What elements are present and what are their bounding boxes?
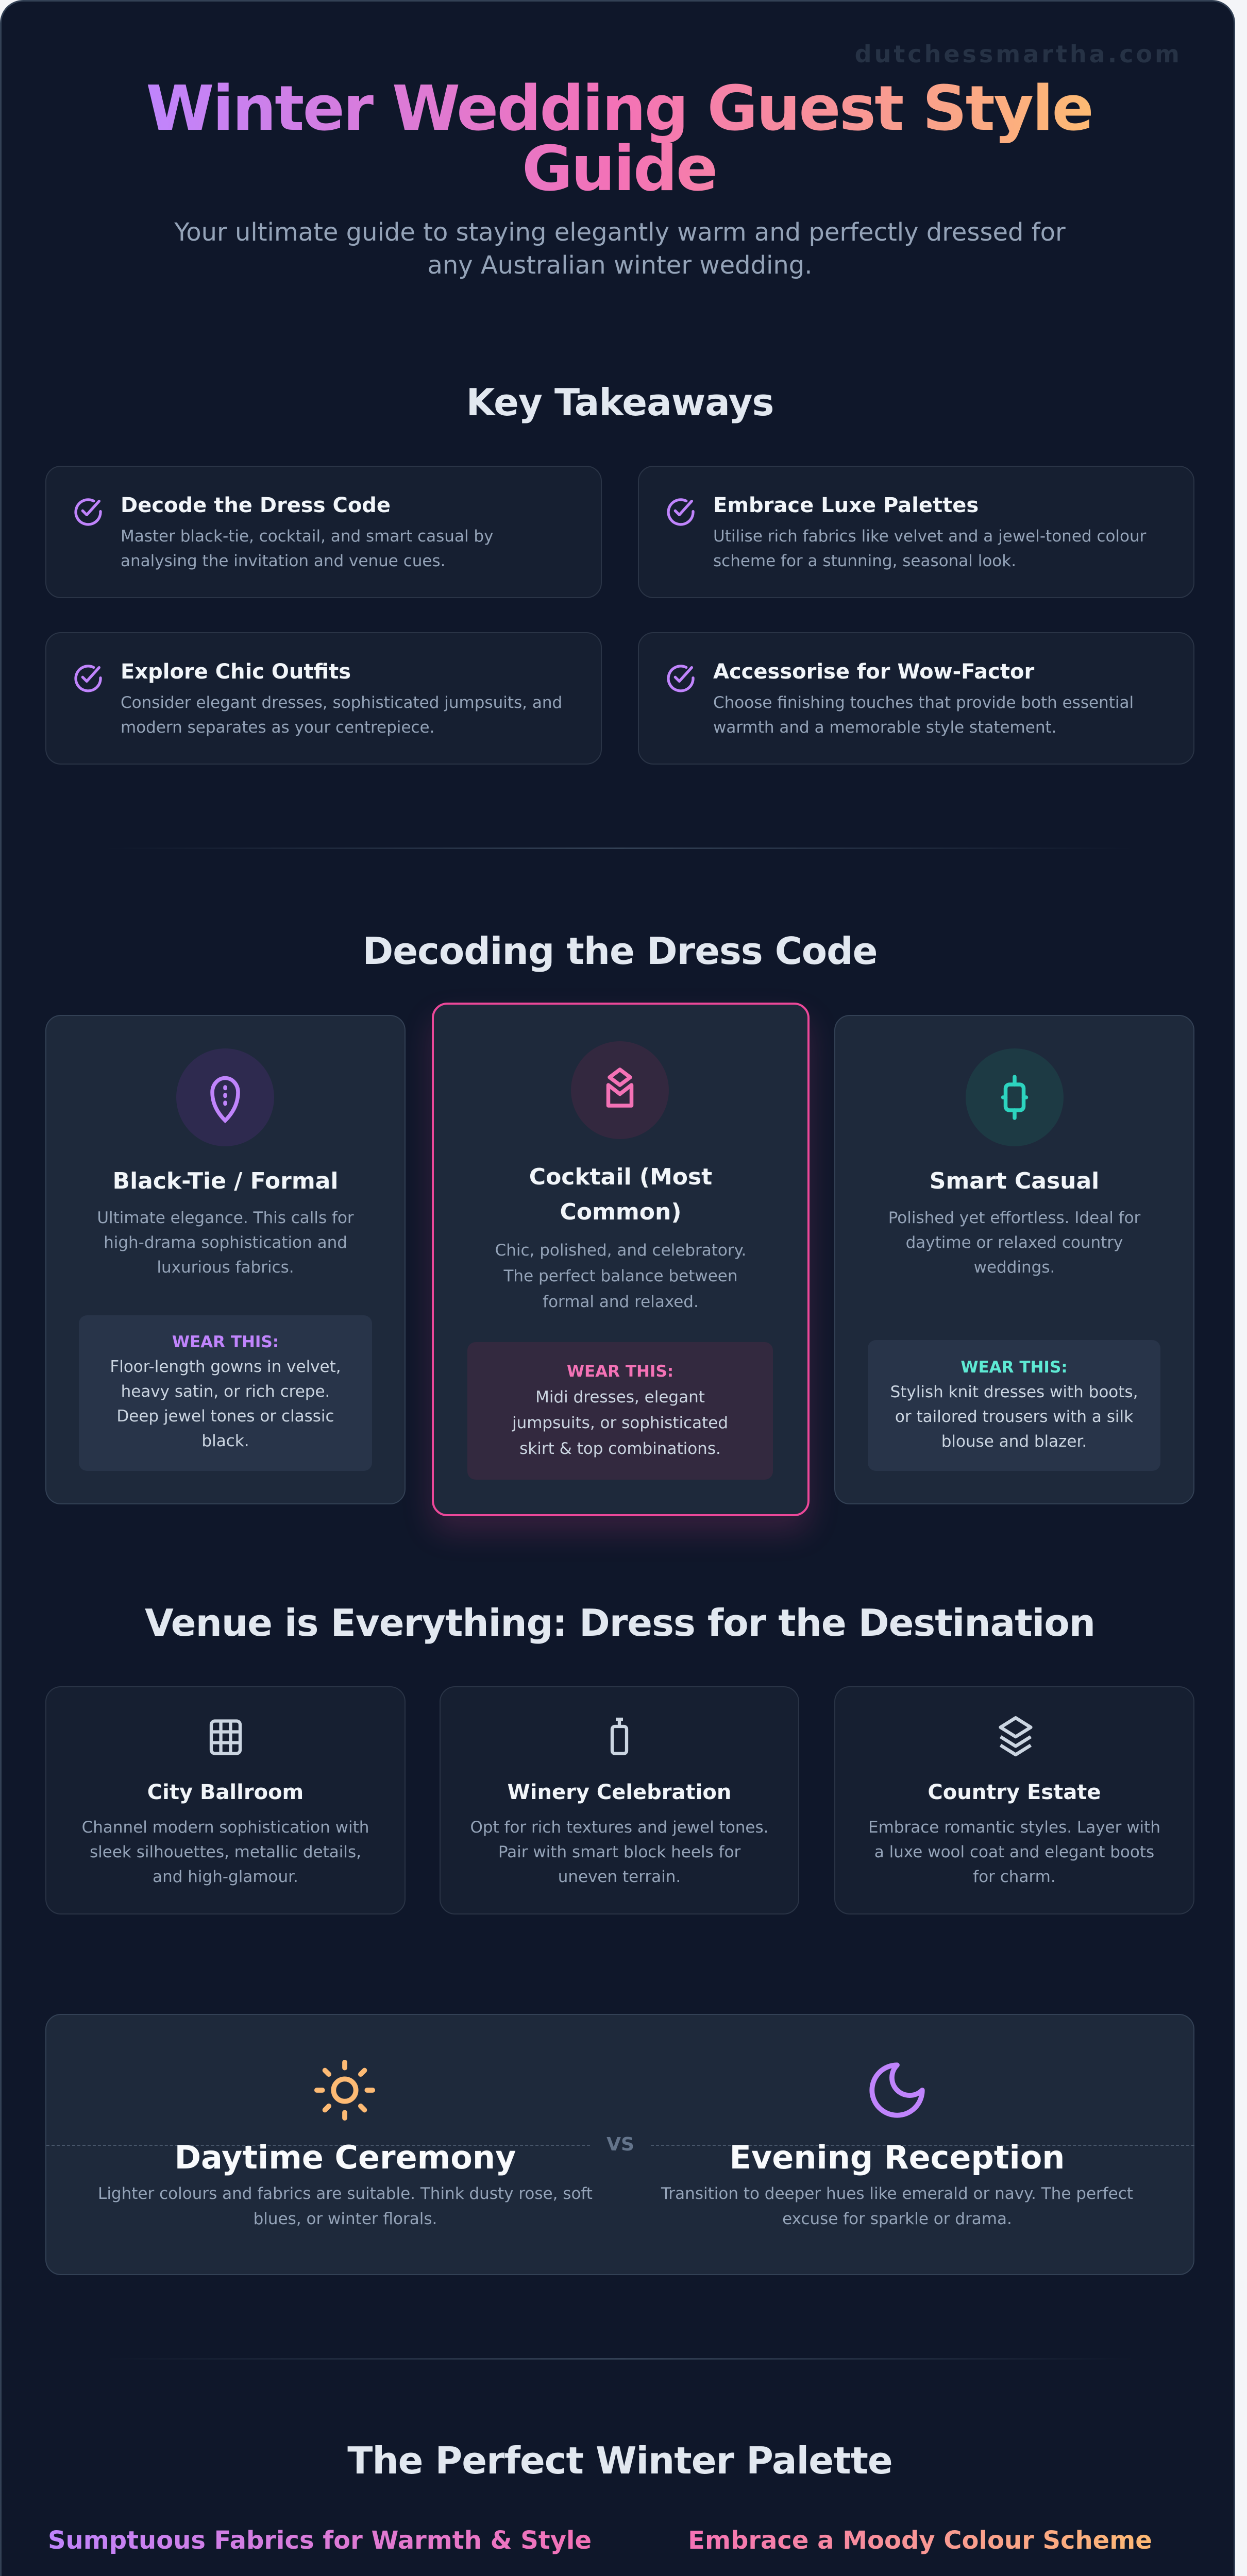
desc: daytime or relaxed country	[906, 1233, 1123, 1252]
title: Country Estate	[928, 1781, 1101, 1804]
icon: check	[667, 498, 695, 526]
text	[713, 660, 1134, 737]
desc: a luxe wool coat and elegant boots	[874, 1843, 1154, 1861]
title: Cocktail (Most	[529, 1164, 712, 1190]
title: City Ballroom	[147, 1781, 304, 1804]
icon	[571, 1041, 669, 1139]
desc: luxurious fabrics.	[157, 1258, 294, 1277]
wear this: Stylish knit dresses with boots,	[890, 1383, 1138, 1401]
text: Accessorise for Wow-Factor	[713, 660, 1034, 684]
text: modern separates as your centrepiece.	[121, 718, 434, 737]
venue: winery	[440, 1686, 799, 1914]
evening text: Transition to deeper hues like emerald or navy. The perfect	[661, 2184, 1133, 2203]
wear this	[868, 1340, 1160, 1471]
desc: Embrace romantic styles. Layer with	[868, 1818, 1160, 1837]
evening text: excuse for sparkle or drama.	[782, 2210, 1012, 2228]
desc: The perfect balance between	[504, 1267, 738, 1285]
icon: sun	[314, 2060, 375, 2121]
evening text: Evening Reception	[730, 2139, 1065, 2176]
heading: key takeaways: Key Takeaways	[466, 381, 773, 424]
subtitle	[174, 218, 1066, 280]
desc: Chic, polished, and celebratory.	[495, 1241, 746, 1260]
venue: country estate	[834, 1686, 1194, 1914]
wear this: Deep jewel tones or classic	[116, 1407, 334, 1426]
desc: formal and relaxed.	[543, 1293, 699, 1311]
wear this: blouse and blazer.	[941, 1432, 1087, 1451]
daytime text	[98, 2139, 593, 2228]
wear this: or tailored trousers with a silk	[895, 1408, 1133, 1426]
subheading: colour scheme: Embrace a Moody Colour Scheme	[688, 2526, 1152, 2555]
venue: city ballroom	[45, 1686, 406, 1914]
dashed line left	[46, 2145, 590, 2146]
icon: layers	[999, 1716, 1033, 1757]
icon	[176, 1048, 274, 1146]
text	[713, 494, 1146, 570]
title: Common)	[560, 1199, 681, 1225]
wear this: Floor-length gowns in velvet,	[110, 1358, 341, 1376]
desc: Opt for rich textures and jewel tones.	[470, 1818, 769, 1837]
desc: Ultimate elegance. This calls for	[97, 1209, 354, 1227]
wear this: jumpsuits, or sophisticated	[512, 1414, 728, 1432]
text: Explore Chic Outfits	[121, 660, 351, 684]
subtitle: Your ultimate guide to staying elegantly warm and perfectly dressed for	[174, 218, 1066, 247]
desc: Channel modern sophistication with	[82, 1818, 369, 1837]
title	[2, 79, 1237, 199]
takeaway 3	[45, 632, 602, 765]
desc: Polished yet effortless. Ideal for	[888, 1209, 1140, 1227]
daytime text: blues, or winter florals.	[254, 2210, 437, 2228]
desc: sleek silhouettes, metallic details,	[90, 1843, 361, 1861]
wear this: Midi dresses, elegant	[535, 1388, 705, 1406]
subtitle: any Australian winter wedding.	[427, 251, 813, 280]
takeaway 2	[638, 466, 1194, 598]
desc: uneven terrain.	[558, 1868, 681, 1886]
desc: for charm.	[973, 1868, 1056, 1886]
text: Embrace Luxe Palettes	[713, 494, 979, 517]
title: Winery Celebration	[508, 1781, 731, 1804]
heading: venue: Venue is Everything: Dress for the Destination	[145, 1601, 1095, 1645]
desc	[868, 1818, 1160, 1886]
text: Choose finishing touches that provide both essential	[713, 693, 1134, 712]
wear this: WEAR THIS:	[172, 1333, 279, 1351]
title	[529, 1164, 712, 1225]
evening text	[661, 2139, 1133, 2228]
text	[121, 494, 493, 570]
title: Winter Wedding Guest Style	[146, 73, 1092, 145]
desc: and high-glamour.	[153, 1868, 298, 1886]
icon	[966, 1048, 1064, 1146]
wear this: WEAR THIS:	[960, 1358, 1068, 1377]
text: Consider elegant dresses, sophisticated jumpsuits, and	[121, 693, 562, 712]
text: Master black-tie, cocktail, and smart casual by	[121, 527, 493, 546]
panel: day vs evening	[45, 2014, 1194, 2275]
icon: moon	[869, 2062, 925, 2118]
icon: bottle	[610, 1718, 629, 1755]
panel: cocktail	[432, 1003, 810, 1516]
takeaway 1	[45, 466, 602, 598]
desc	[495, 1241, 746, 1311]
desc: Pair with smart block heels for	[498, 1843, 740, 1861]
desc	[82, 1818, 369, 1886]
vs: VS	[606, 2134, 634, 2155]
wear this: skirt & top combinations.	[519, 1439, 721, 1458]
desc	[470, 1818, 769, 1886]
text: Decode the Dress Code	[121, 494, 391, 517]
daytime text: Daytime Ceremony	[175, 2139, 516, 2176]
panel: black-tie	[45, 1015, 406, 1504]
text: warmth and a memorable style statement.	[713, 718, 1056, 737]
icon: check	[74, 665, 102, 692]
text: Utilise rich fabrics like velvet and a jewel-toned colour	[713, 527, 1146, 546]
wear this	[79, 1315, 372, 1471]
title: Smart Casual	[930, 1168, 1099, 1194]
takeaway 4	[638, 632, 1194, 765]
desc: high-drama sophistication and	[104, 1233, 347, 1252]
wear this: black.	[201, 1432, 249, 1450]
icon: grid	[209, 1719, 242, 1755]
icon: check	[74, 498, 102, 526]
dashed line right	[651, 2145, 1194, 2146]
icon: check	[667, 665, 695, 692]
desc	[888, 1209, 1141, 1277]
heading: decoding: Decoding the Dress Code	[363, 929, 877, 973]
wear this: WEAR THIS:	[567, 1362, 673, 1381]
watermark top: dutchessmartha.com	[855, 40, 1182, 68]
daytime text: Lighter colours and fabrics are suitable. Think dusty rose, soft	[98, 2184, 593, 2203]
text	[121, 660, 562, 737]
subheading: fabrics: Sumptuous Fabrics for Warmth & Style	[48, 2526, 592, 2555]
desc: weddings.	[974, 1258, 1055, 1277]
text: analysing the invitation and venue cues.	[121, 552, 445, 570]
wear this	[467, 1342, 773, 1480]
title: Guide	[522, 133, 716, 205]
heading: palette: The Perfect Winter Palette	[347, 2439, 892, 2482]
panel: smart casual	[834, 1015, 1194, 1504]
desc	[97, 1209, 354, 1277]
title: Black-Tie / Formal	[113, 1168, 338, 1194]
wear this: heavy satin, or rich crepe.	[121, 1382, 330, 1401]
text: scheme for a stunning, seasonal look.	[713, 552, 1016, 570]
